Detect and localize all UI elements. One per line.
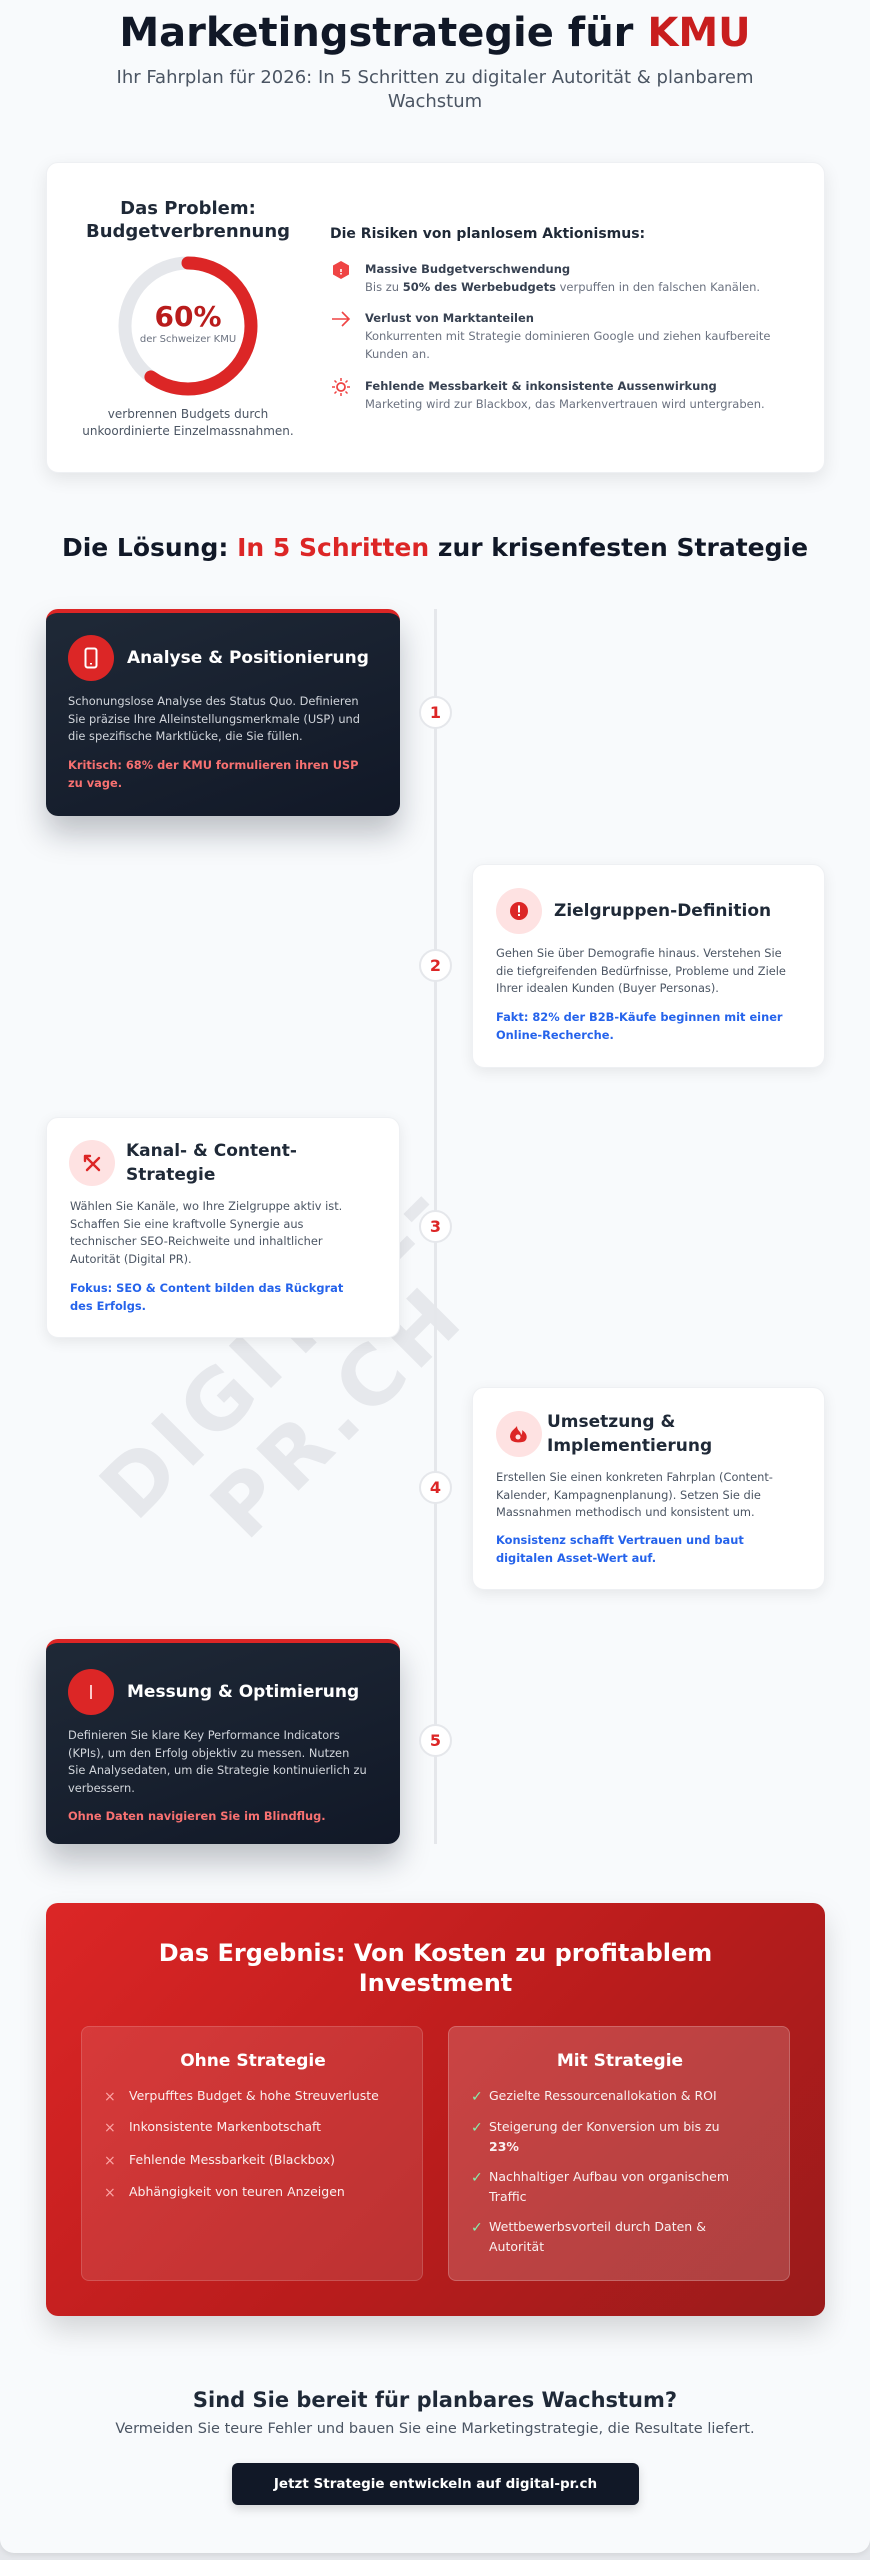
step 1 card: Kritisch: 68% der KMU formulieren ihren USP: [68, 758, 358, 772]
step 5 card: (KPIs), um den Erfolg objektiv zu messen. Nutzen: [68, 1746, 349, 1760]
step 1 card: Sie präzise Ihre Alleinstellungsmerkmale (USP) und: [68, 712, 360, 726]
step number 3: [419, 1210, 452, 1243]
step 4 card: Kalender, Kampagnenplanung). Setzen Sie die: [496, 1488, 761, 1502]
step 5 card: Messung & Optimierung: [127, 1682, 359, 1702]
box: mit strategie: ✓: [471, 2170, 483, 2186]
step 2 card: Zielgruppen-Definition: [554, 901, 771, 921]
step number 1: [419, 696, 452, 729]
CTA button: Jetzt Strategie entwickeln auf digital-pr.ch: [274, 2476, 597, 2492]
box: ohne strategie: ×: [104, 2153, 116, 2169]
step 4 card: Erstellen Sie einen konkreten Fahrplan (Content-: [496, 1470, 773, 1484]
step 4 card: Massnahmen methodisch und konsistent um.: [496, 1505, 755, 1519]
step 4 card: digitalen Asset-Wert auf.: [496, 1551, 656, 1565]
risk item 3: [332, 378, 765, 411]
step 2 card: Online-Recherche.: [496, 1028, 614, 1042]
caption: unkoordinierte Einzelmassnahmen.: [82, 424, 294, 438]
CTA button: [232, 2463, 639, 2505]
box: ohne strategie: ×: [104, 2089, 116, 2105]
step 4 card: Umsetzung &: [547, 1412, 675, 1432]
box: mit strategie: [448, 2026, 790, 2281]
icon: alert: [496, 888, 542, 934]
step 2 card: Gehen Sie über Demografie hinaus. Verstehen Sie: [496, 946, 782, 960]
box: ohne strategie: Abhängigkeit von teuren Anzeigen: [129, 2184, 345, 2199]
icon: measure: [68, 1669, 114, 1715]
icon: hexagon alert: [333, 261, 349, 279]
box: mit strategie: ✓: [471, 2089, 483, 2105]
box: mit strategie: Steigerung der Konversion um bis zu: [489, 2119, 720, 2134]
step number 2: [419, 949, 452, 982]
CTA text: Vermeiden Sie teure Fehler und bauen Sie eine Marketingstrategie, die Resultate liefert.: [115, 2421, 755, 2437]
panel: result: [46, 1903, 825, 2316]
step 2 card: [472, 864, 825, 1068]
step 5 card: verbessern.: [68, 1781, 135, 1795]
step 5 card: [46, 1639, 400, 1844]
step 1 card: [46, 609, 400, 816]
heading: result: Das Ergebnis: Von Kosten zu profitablem: [159, 1939, 712, 1967]
heading: Das Problem: [86, 198, 290, 242]
step 1 card: Analyse & Positionierung: [127, 648, 369, 668]
step number 5: [419, 1724, 452, 1757]
step 1 card: Schonungslose Analyse des Status Quo. Definieren: [68, 694, 359, 708]
box: mit strategie: Mit Strategie: [557, 2051, 683, 2071]
box: ohne strategie: ×: [104, 2185, 116, 2201]
timeline line: [434, 609, 437, 1844]
box: ohne strategie: Fehlende Messbarkeit (Blackbox): [129, 2152, 335, 2167]
step 5 card: Definieren Sie klare Key Performance Indicators: [68, 1728, 340, 1742]
step number 3: 3: [430, 1217, 441, 1236]
heading: Das Problem: Das Problem:: [120, 198, 256, 219]
box: mit strategie: Wettbewerbsvorteil durch Daten &: [489, 2219, 706, 2234]
box: ohne strategie: [81, 2026, 423, 2281]
box: mit strategie: 23%: [489, 2139, 519, 2154]
subtitle: Wachstum: [388, 91, 482, 112]
step number 1: 1: [430, 703, 441, 722]
risk item 1: Bis zu 50% des Werbebudgets verpuffen in den falschen Kanälen.: [365, 280, 760, 294]
step 3 card: [46, 1117, 400, 1338]
step 5 card: Sie Analysedaten, um die Strategie kontinuierlich zu: [68, 1763, 367, 1777]
box: mit strategie: ✓: [471, 2220, 483, 2236]
heading: solution: Die Lösung: In 5 Schritten zur krisenfesten Strategie: [62, 533, 808, 562]
step number 5: 5: [430, 1731, 441, 1750]
chart: donut 60%: 60%: [154, 300, 222, 333]
step 2 card: die tiefgreifenden Bedürfnisse, Probleme und Ziele: [496, 964, 786, 978]
step number 4: [419, 1471, 452, 1504]
step 4 card: [472, 1387, 825, 1590]
step 4 card: Konsistenz schafft Vertrauen und baut: [496, 1533, 744, 1547]
heading: Das Problem: Budgetverbrennung: [86, 221, 290, 242]
step 4 card: Implementierung: [547, 1436, 712, 1456]
box: mit strategie: ✓: [471, 2120, 483, 2136]
icon: phone: [68, 635, 114, 681]
step 3 card: Kanal- & Content-: [126, 1141, 297, 1161]
step 2 card: Ihrer idealen Kunden (Buyer Personas).: [496, 981, 719, 995]
icon: flame: [496, 1411, 542, 1457]
box: ohne strategie: Inkonsistente Markenbotschaft: [129, 2119, 321, 2134]
risk item 2: Kunden an.: [365, 346, 430, 360]
step 3 card: Strategie: [126, 1165, 215, 1185]
subtitle: [117, 67, 753, 112]
box: mit strategie: Autorität: [489, 2239, 544, 2254]
step 3 card: des Erfolgs.: [70, 1299, 146, 1313]
icon: sun/gear: [332, 378, 350, 396]
step 2 card: Fakt: 82% der B2B-Käufe beginnen mit einer: [496, 1010, 783, 1024]
step 3 card: Fokus: SEO & Content bilden das Rückgrat: [70, 1281, 343, 1295]
watermark: PR.CH: [193, 1267, 483, 1557]
risk item 1: [333, 261, 760, 294]
box: mit strategie: Gezielte Ressourcenallokation & ROI: [489, 2088, 717, 2103]
chart: donut 60%: [118, 256, 258, 396]
caption: [82, 407, 294, 438]
step 3 card: Schaffen Sie eine kraftvolle Synergie aus: [70, 1216, 303, 1230]
box: ohne strategie: ×: [104, 2120, 116, 2136]
caption: verbrennen Budgets durch: [108, 407, 268, 421]
chart: donut 60%: der Schweizer KMU: [140, 334, 236, 345]
CTA heading: Sind Sie bereit für planbares Wachstum?: [193, 2388, 677, 2412]
risk item 3: Marketing wird zur Blackbox, das Markenvertrauen wird untergraben.: [365, 397, 765, 411]
box: mit strategie: Traffic: [489, 2189, 527, 2204]
risk item 3: Fehlende Messbarkeit & inkonsistente Aussenwirkung: [365, 379, 717, 393]
heading: result: [159, 1939, 712, 1997]
box: ohne strategie: Verpufftes Budget & hohe Streuverluste: [129, 2088, 379, 2103]
heading: result: Investment: [359, 1969, 512, 1997]
step 3 card: technischer SEO-Reichweite und inhaltlicher: [70, 1234, 323, 1248]
risk item 2: [332, 311, 770, 360]
icon: cross tools: [69, 1140, 115, 1186]
step 1 card: die spezifische Marktlücke, die Sie füllen.: [68, 729, 303, 743]
subtitle: Ihr Fahrplan für 2026: In 5 Schritten zu digitaler Autorität & planbarem: [117, 67, 753, 88]
step 3 card: Wählen Sie Kanäle, wo Ihre Zielgruppe aktiv ist.: [70, 1199, 342, 1213]
risk item 2: Konkurrenten mit Strategie dominieren Google und ziehen kaufbereite: [365, 329, 770, 343]
watermark: DIGITAL-: [83, 1157, 464, 1538]
panel: problem: [46, 162, 825, 473]
step 3 card: Autorität (Digital PR).: [70, 1252, 192, 1266]
heading: risks: Die Risiken von planlosem Aktionismus:: [330, 226, 645, 242]
step number 4: 4: [430, 1478, 441, 1497]
icon: arrow: [332, 311, 350, 327]
step number 2: 2: [430, 956, 441, 975]
box: mit strategie: Nachhaltiger Aufbau von organischem: [489, 2169, 729, 2184]
title: Marketingstrategie für KMU: [119, 10, 751, 56]
step 1 card: zu vage.: [68, 776, 122, 790]
risk item 2: Verlust von Marktanteilen: [365, 311, 534, 325]
risk item 1: Massive Budgetverschwendung: [365, 262, 570, 276]
step 5 card: Ohne Daten navigieren Sie im Blindflug.: [68, 1809, 326, 1823]
box: ohne strategie: Ohne Strategie: [180, 2051, 326, 2071]
